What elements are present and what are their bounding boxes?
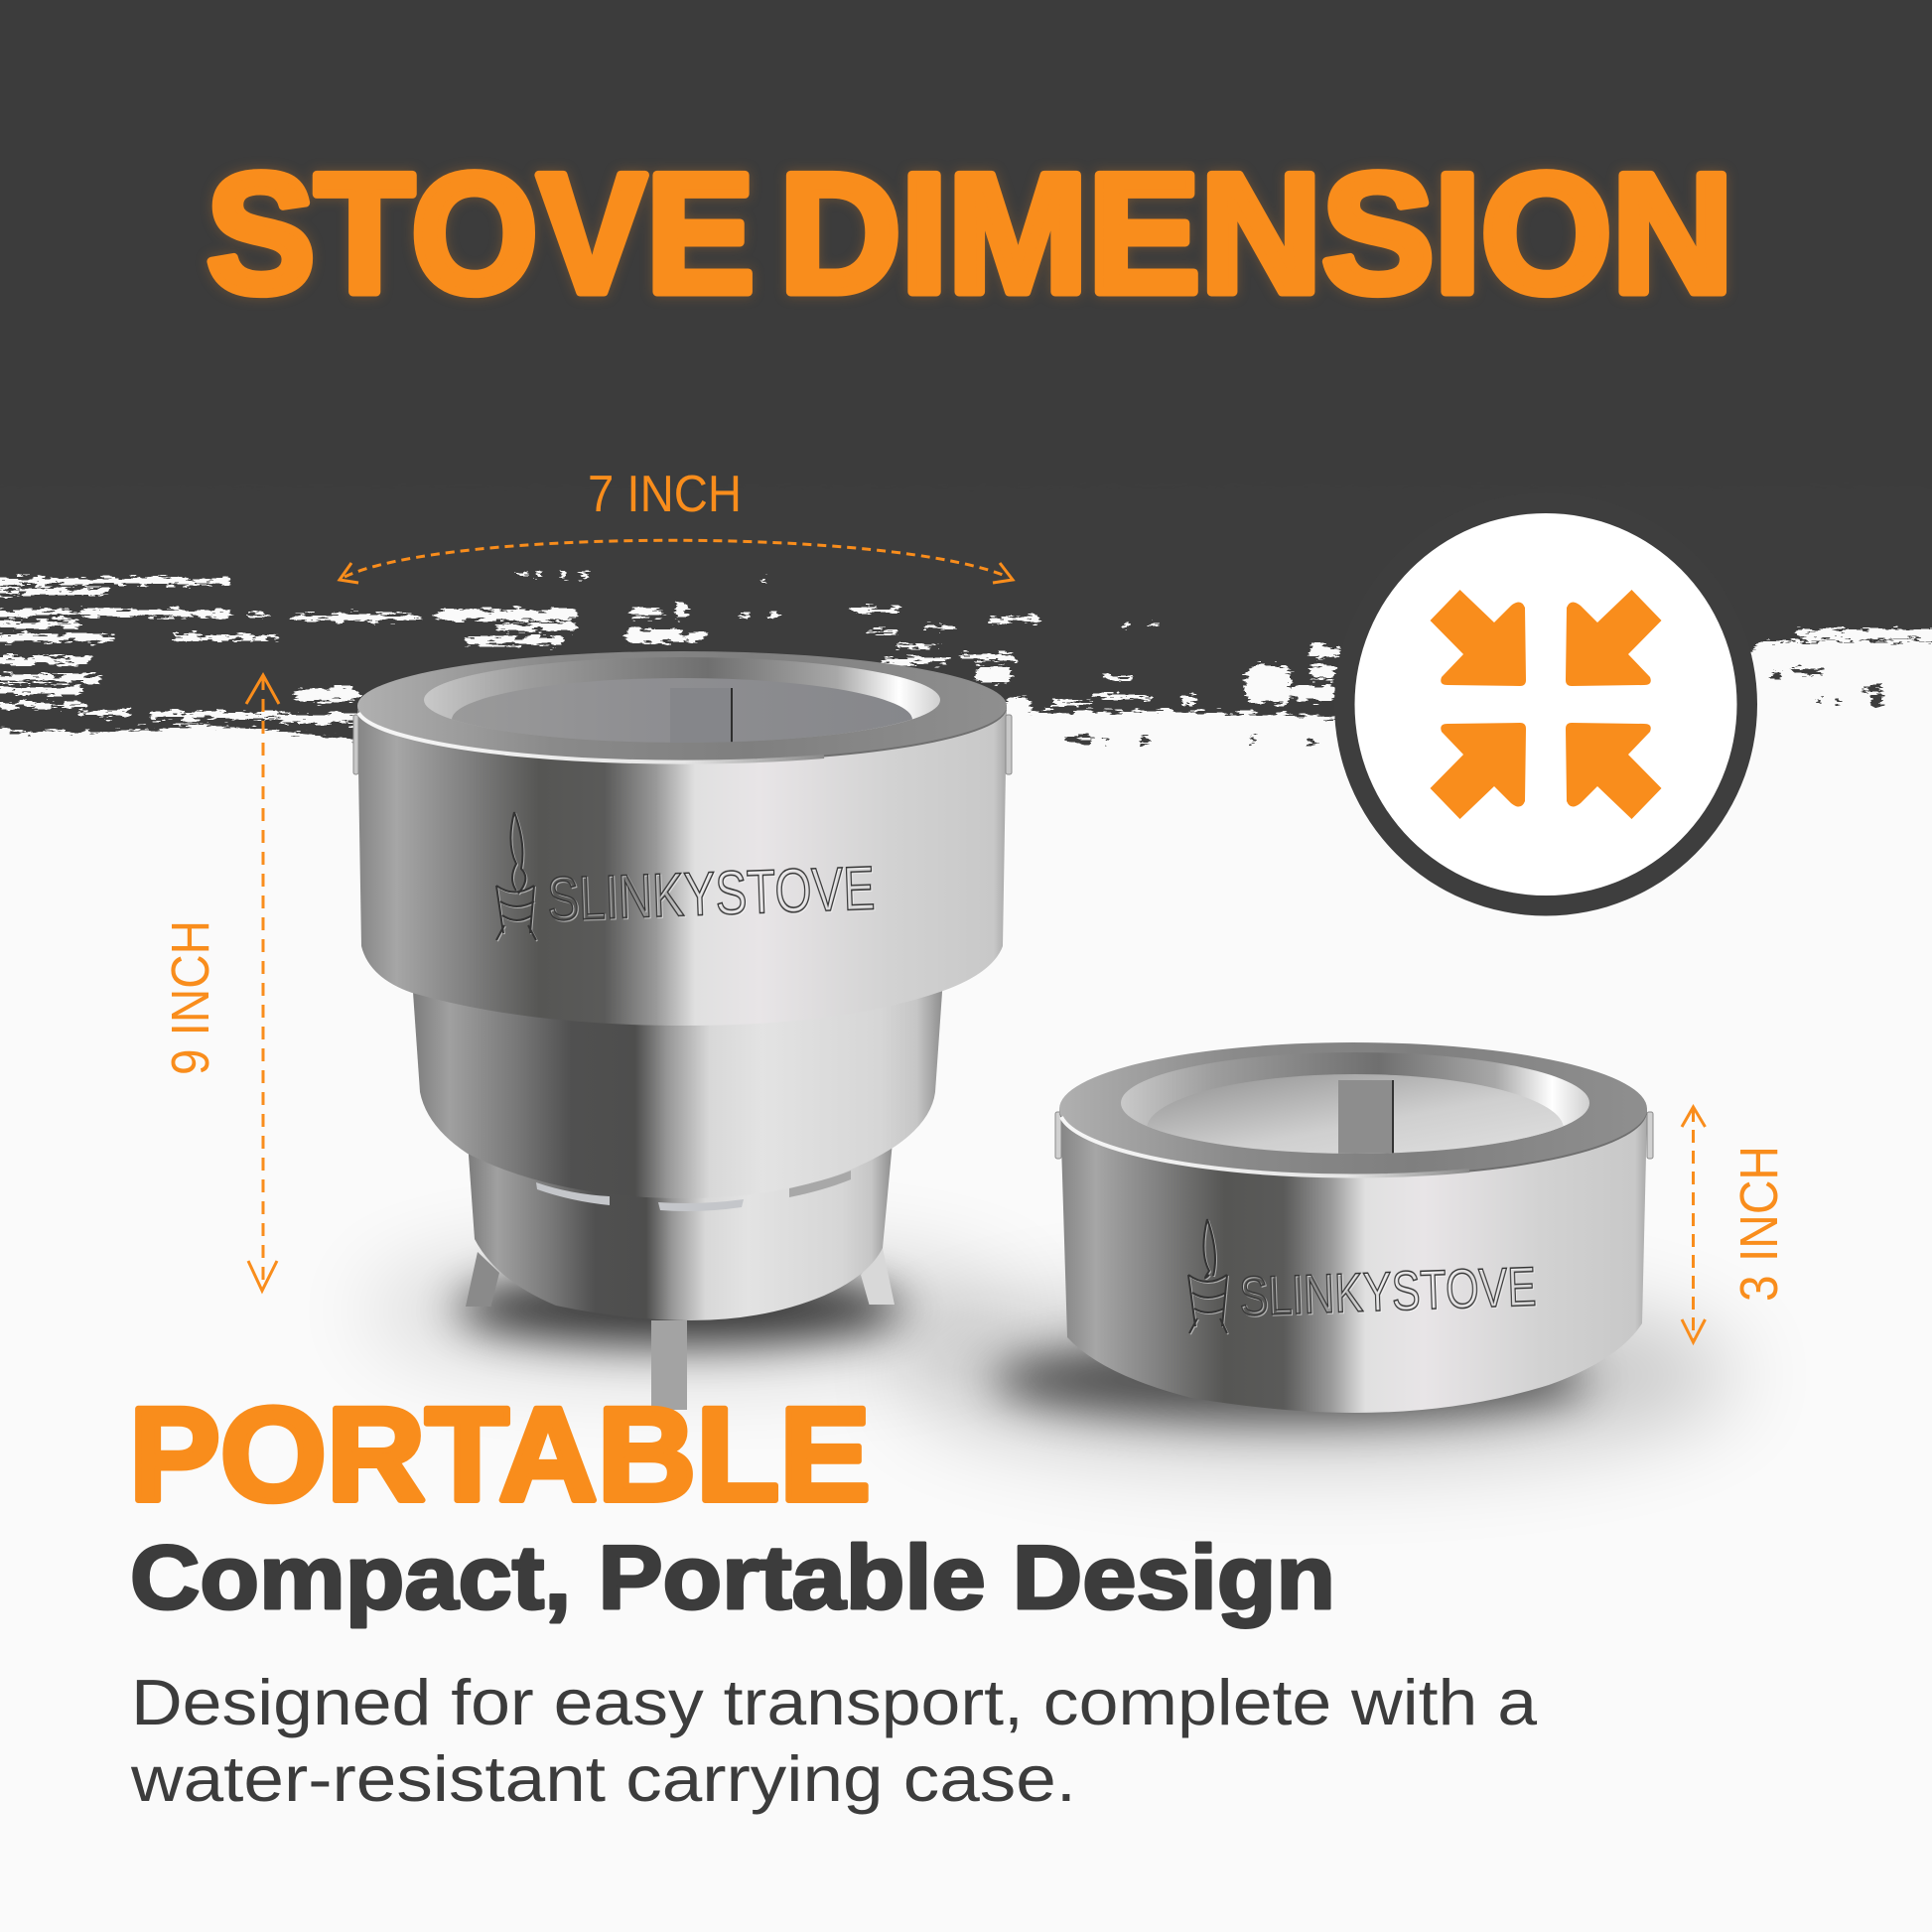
logo mark: flame and coil: [1188, 1219, 1227, 1333]
subheading: Compact, Portable Design: Compact, Portable Design: [130, 1528, 1335, 1628]
label: 9 INCH: 9 INCH: [161, 920, 220, 1075]
title: STOVE DIMENSION: DIMENSION: [779, 139, 1733, 329]
inner ring and floor: [424, 657, 940, 743]
badge: compact icon: [1334, 492, 1757, 915]
middle section: [412, 978, 943, 1198]
illustration: collapsed stove: [1055, 1042, 1653, 1413]
engraved logo: [1188, 1219, 1537, 1333]
icon: four inward arrows: [1430, 590, 1662, 819]
top rim: [357, 651, 1007, 760]
dark header panel: [0, 0, 1932, 621]
rim bevel: [1059, 1044, 1647, 1177]
stove legs: [466, 1248, 895, 1410]
heading: PORTABLE: PORTABLE: [129, 1381, 871, 1529]
rim highlight: [358, 713, 824, 762]
dimension: 7 inch width: [340, 466, 1013, 583]
body text: [130, 1666, 1538, 1815]
logo mark: flame and coil: [496, 812, 536, 940]
side handles: [353, 715, 1012, 774]
dimension: 9 inch height: [161, 675, 279, 1291]
side handles: [1055, 1112, 1653, 1159]
rim highlight: [1061, 1117, 1469, 1175]
body text: Designed for easy transport, complete with a: [131, 1666, 1538, 1738]
upper section: [357, 710, 1007, 1026]
lower section with vents: [468, 1142, 893, 1320]
collapsed stove body: [1060, 1112, 1647, 1413]
engraved logo: [496, 812, 876, 940]
top rim: [1059, 1042, 1647, 1175]
arrow: vertical height arrow: [1682, 1107, 1706, 1342]
dimension: 3 inch height: [1682, 1107, 1789, 1342]
body text: water-resistant carrying case.: [130, 1742, 1076, 1815]
title: STOVE DIMENSION: [207, 139, 1733, 329]
logo wordmark: SLINKYSTOVE: [546, 855, 876, 934]
arrow: curved width arrow: [340, 540, 1013, 583]
brush edge texture: [0, 486, 1932, 745]
rim bevel: [357, 653, 1007, 762]
title: STOVE DIMENSION: STOVE: [207, 139, 755, 329]
ground shadows: [367, 1251, 1737, 1459]
label: 3 INCH: 3 INCH: [1729, 1146, 1789, 1302]
label: 7 INCH: 7 INCH: [588, 466, 742, 523]
inner ring and floor: [1121, 1052, 1589, 1154]
arrow: vertical height arrow: [246, 675, 279, 1291]
illustration: tall expanded stove: [353, 651, 1012, 1410]
logo wordmark: SLINKYSTOVE: [1238, 1255, 1537, 1327]
